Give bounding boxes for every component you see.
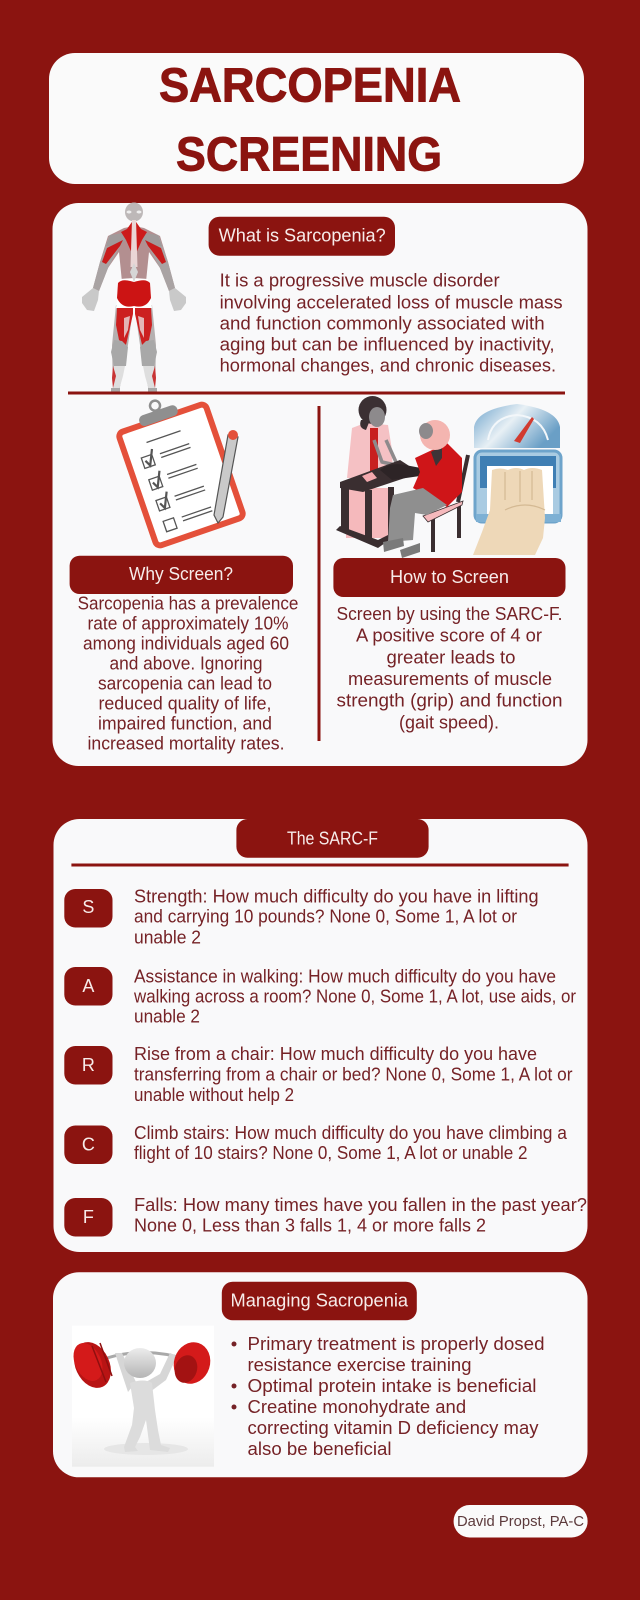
item: A assistance in walking: walking across a room? None 0, Some 1, A lot, use aids, or [133,987,576,1007]
item: S strength: Strength: How much difficulty do you have in lifting [134,887,539,907]
text block: how to screen [336,604,562,732]
heading: what is sarcopenia: What is Sarcopenia? [219,226,386,246]
item: C climb stairs: C [82,1134,95,1154]
text block: how to screen: strength (grip) and function [336,691,562,711]
heading: how to screen: How to Screen [390,567,509,587]
item: S strength: and carrying 10 pounds? None 0, Some 1, A lot or [134,907,517,927]
bullet list: management: resistance exercise training [248,1355,472,1375]
author credit: David Propst, PA-C [457,1513,584,1530]
item: R rise from a chair: unable without help 2 [134,1085,294,1105]
text block: why screen: impaired function, and [98,713,272,733]
item: C climb stairs: flight of 10 stairs? None 0, Some 1, A lot or unable 2 [134,1143,528,1163]
title: SARCOPENIA [159,60,461,112]
heading: why screen [70,556,293,594]
heading: managing sarcopenia: Managing Sacropenia [231,1291,409,1311]
item: S strength: unable 2 [134,927,201,947]
heading: why screen: Why Screen? [129,564,233,584]
icon: clipboard checklist [112,385,244,547]
bullet list: management: correcting vitamin D deficiency may [248,1418,538,1438]
panel: the SARC-F questionnaire [54,819,588,1252]
text block: how to screen: A positive score of 4 or [356,626,542,646]
author credit [454,1505,588,1538]
item: S strength: S [82,897,94,917]
text block: why screen: sarcopenia can lead to [98,673,272,693]
item: R rise from a chair: R [82,1055,95,1075]
heading: how to screen [333,558,566,597]
item: F falls: None 0, Less than 3 falls 1, 4 or more falls 2 [134,1216,486,1236]
heading: the SARC-F [236,819,429,858]
text block: why screen: rate of approximately 10% [88,613,288,633]
bullet list: management: Optimal protein intake is beneficial [248,1376,536,1396]
heading: the SARC-F: The SARC-F [287,828,378,848]
item: F falls: Falls: How many times have you fallen in the past year? [134,1195,587,1215]
illustration: figure lifting a barbell [67,1326,216,1467]
heading: what is sarcopenia [209,217,395,256]
text block: why screen: increased mortality rates. [88,733,284,753]
item: S strength [64,887,539,947]
text block: how to screen: greater leads to [386,647,516,667]
text block: how to screen: (gait speed). [399,712,499,732]
title [49,53,584,184]
text block: why screen: reduced quality of life, [98,693,272,713]
text block: definition: aging but can be influenced by inactivity, [220,334,555,354]
text block: how to screen: Screen by using the SARC-F. [336,604,562,624]
text block: definition: involving accelerated loss of muscle mass [220,292,563,312]
text block: definition: and function commonly associated with [220,313,545,333]
item: R rise from a chair: Rise from a chair: How much difficulty do you have [134,1044,537,1064]
panel: what is sarcopenia, why and how to screen [52,202,588,766]
illustration: hand grip dynamometer [473,404,561,555]
item: C climb stairs [64,1123,568,1164]
text block: why screen [78,593,298,753]
bullet list: management: Primary treatment is properly dosed [248,1334,544,1354]
item: A assistance in walking: Assistance in walking: How much difficulty do you have [134,967,556,987]
icon: back muscle anatomy figure [82,202,186,393]
item: A assistance in walking: A [82,976,94,996]
text block: why screen: Sarcopenia has a prevalence [78,593,298,613]
text block: definition: hormonal changes, and chronic diseases. [220,356,556,376]
text block: definition [220,271,563,376]
item: F falls: F [83,1207,94,1227]
text block: how to screen: measurements of muscle [348,669,552,689]
item: A assistance in walking [64,967,576,1027]
title: SCREENING [176,128,442,182]
bullet list: management: Creatine monohydrate and [248,1397,466,1417]
heading: managing sarcopenia [222,1282,417,1320]
text block: why screen: among individuals aged 60 [83,633,289,653]
bullet list: management: also be beneficial [248,1439,392,1459]
item: R rise from a chair [64,1044,573,1105]
item: R rise from a chair: transferring from a chair or bed? None 0, Some 1, A lot or [134,1065,573,1085]
text block: definition: It is a progressive muscle disorder [220,271,500,291]
item: C climb stairs: Climb stairs: How much difficulty do you have climbing a [134,1123,568,1143]
illustration: clinician measuring seated patient [336,396,468,558]
item: F falls [64,1195,587,1236]
text block: why screen: and above. Ignoring [110,653,262,673]
item: A assistance in walking: unable 2 [134,1007,200,1027]
bullet list: management [232,1334,544,1459]
panel: managing sarcopenia [53,1272,588,1477]
